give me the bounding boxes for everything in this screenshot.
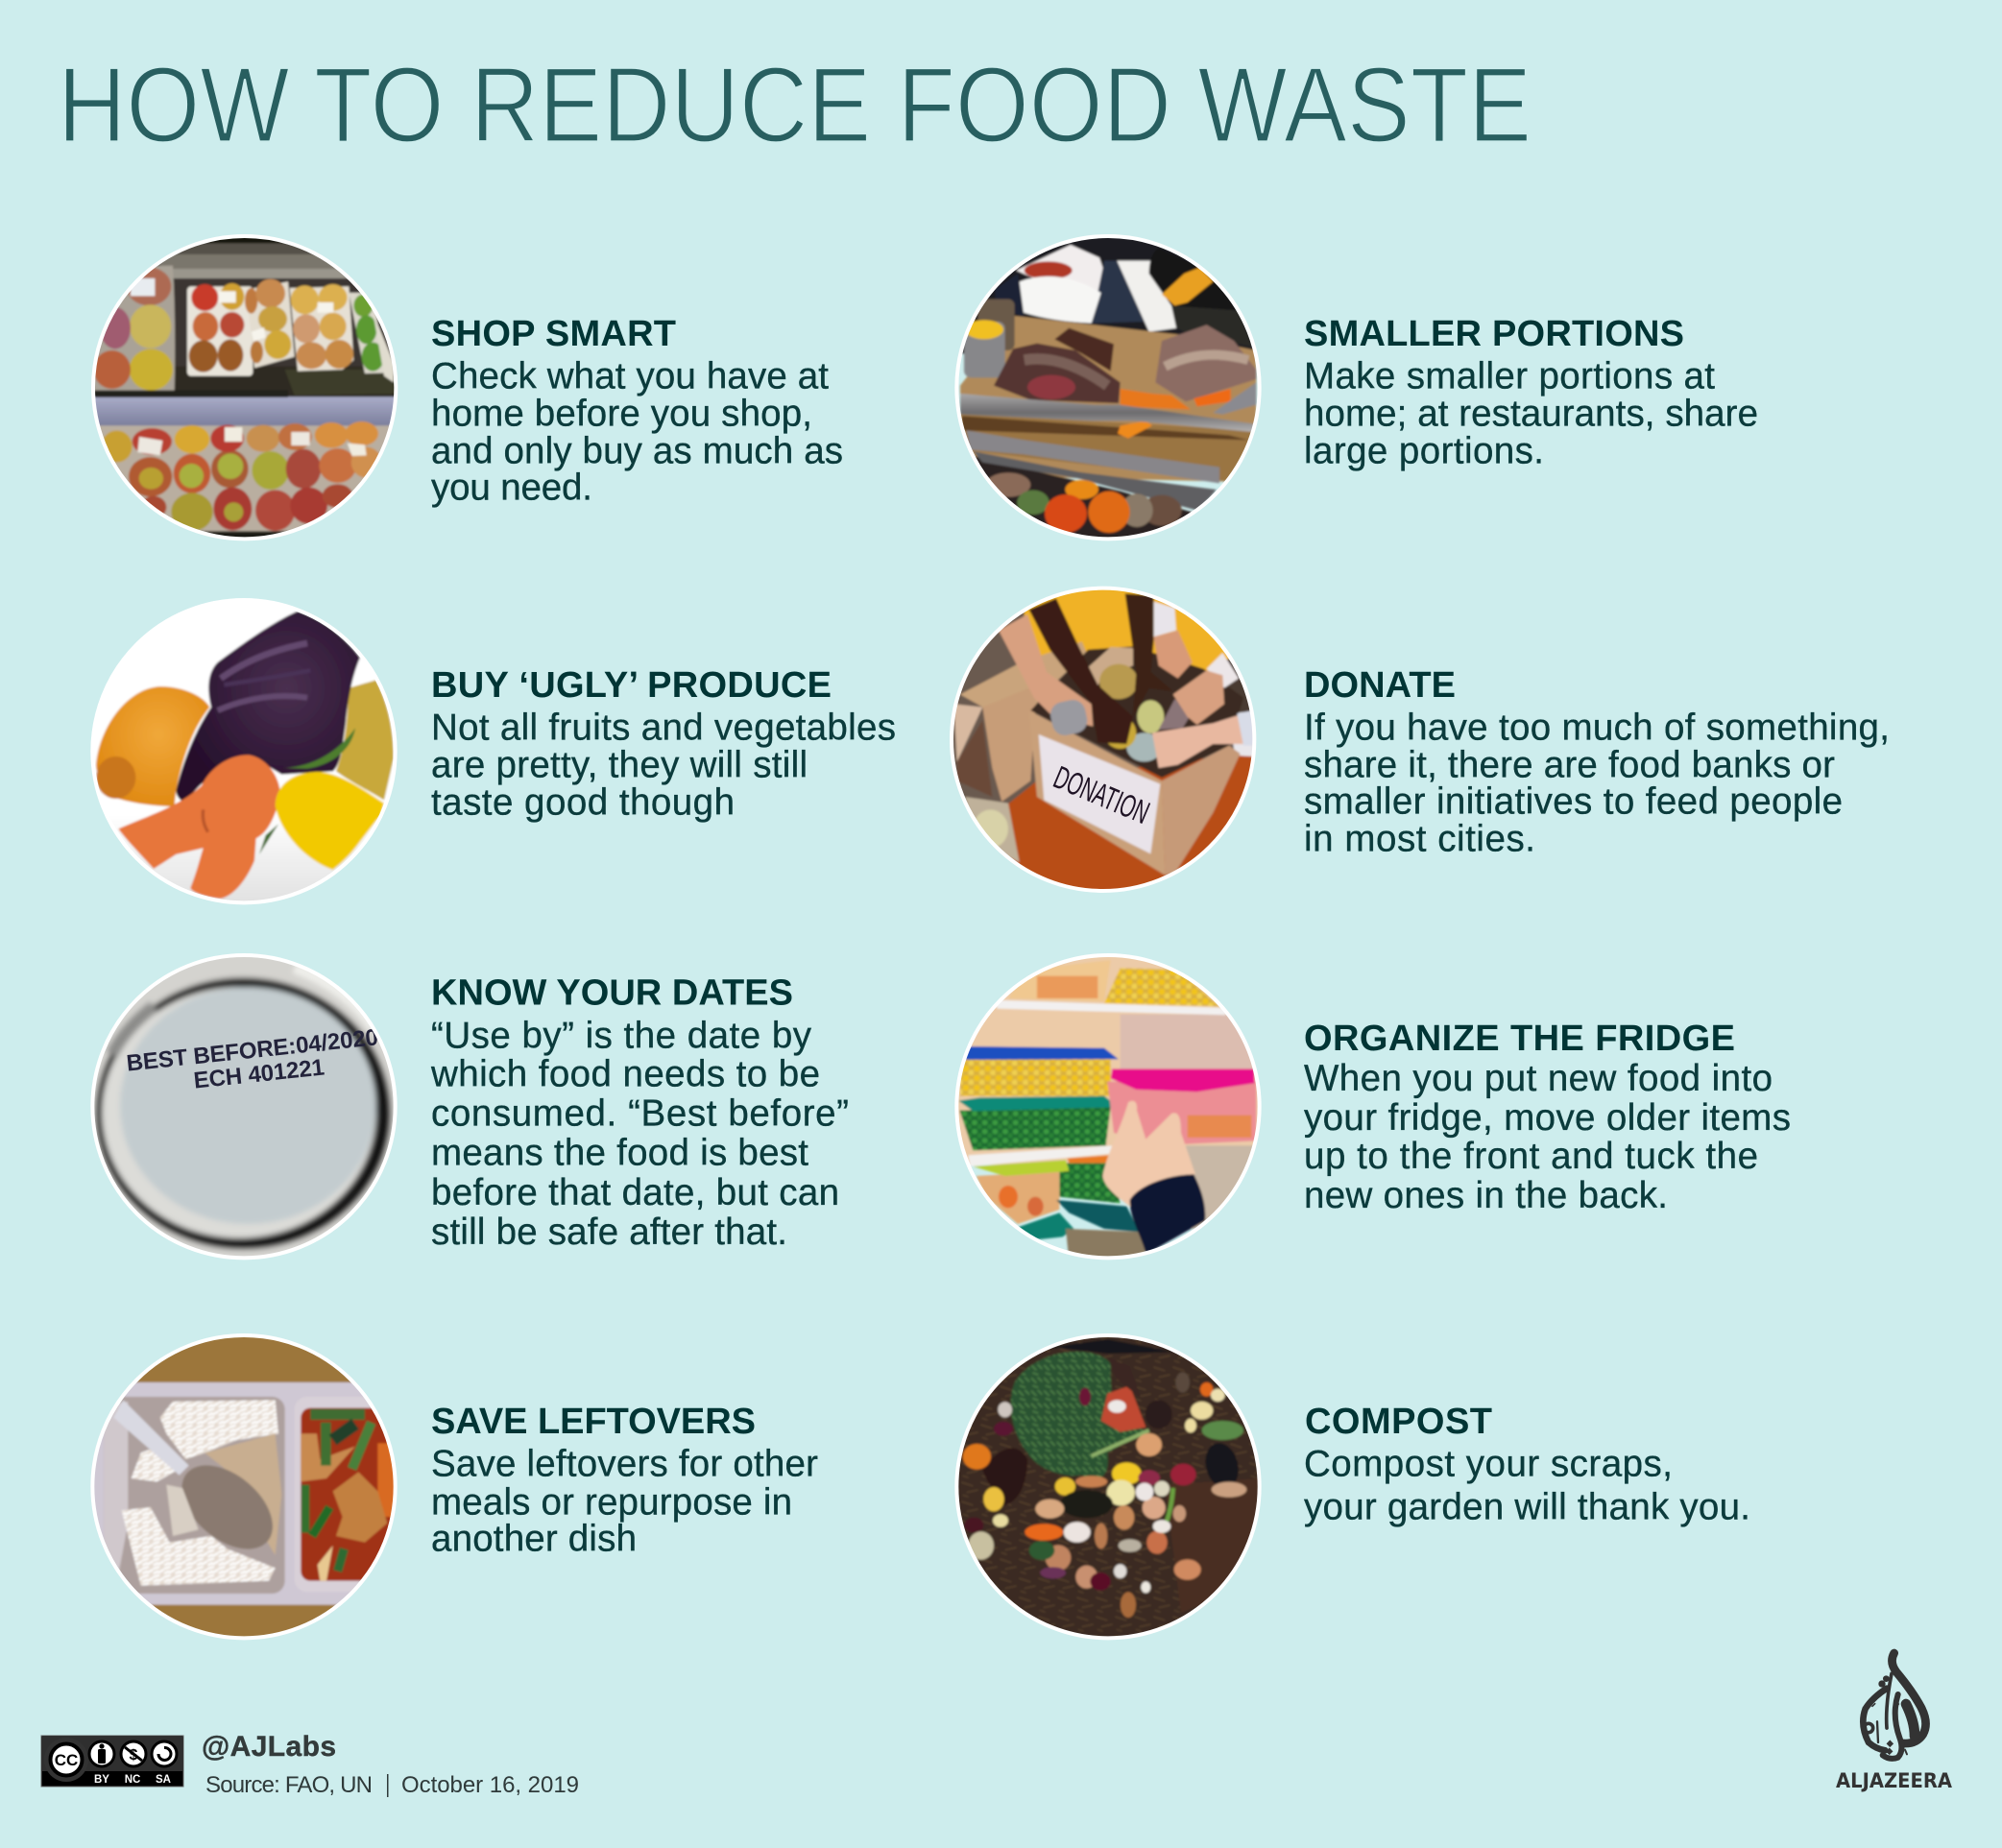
body text: large portions. [1304,431,1544,472]
panel: donate [941,576,1890,902]
photo: can lid with best before date [90,953,398,1260]
footer: creative commons badge [41,1736,183,1787]
photo: can lid with best before date: BEST BEFORE:04/2020 [125,1024,379,1077]
body text: “Use by” is the date by [431,1016,812,1057]
body text [1304,1444,1750,1528]
body text: in most cities. [1304,819,1535,860]
body text: home; at restaurants, share [1304,394,1758,435]
photo: donation box with cans: DONATION [1049,760,1154,831]
body text: new ones in the back. [1304,1175,1668,1216]
body text: When you put new food into [1304,1058,1773,1099]
body text: consumed. “Best before” [431,1092,849,1134]
logo: Al Jazeera: ALJAZEERA [1836,1769,1953,1792]
body text: still be safe after that. [431,1212,787,1253]
body text: up to the front and tuck the [1304,1136,1758,1177]
body text: another dish [431,1519,637,1560]
heading: COMPOST [1305,1402,1492,1442]
body text [1304,708,1890,860]
footer: handle: @AJLabs [202,1731,336,1763]
panel: smaller portions [941,226,1758,545]
body text [1304,356,1758,472]
panel: organize the fridge [941,941,1791,1260]
body text: before that date, but can [431,1172,839,1213]
title: HOW TO REDUCE FOOD WASTE [58,46,1532,165]
photo: misshapen fruit and vegetables [90,598,398,904]
body text: means the food is best [431,1132,808,1173]
body text: smaller initiatives to feed people [1304,781,1843,823]
body text: Save leftovers for other [431,1444,818,1485]
panel: buy ugly produce [77,586,896,912]
body text: which food needs to be [430,1054,820,1095]
panel: know your dates [77,946,849,1272]
footer: source and date: Source: FAO, UN [205,1772,373,1798]
photo: leftovers in a plastic tray [90,1333,398,1640]
body text: home before you shop, [431,394,812,435]
heading: KNOW YOUR DATES [431,973,793,1014]
photo: apples on a shelf [91,234,398,541]
body text: taste good though [431,782,735,824]
footer: creative commons badge: BY [94,1774,109,1786]
body text: your garden will thank you. [1304,1487,1750,1528]
body text [431,356,843,509]
photo: food containers in a fridge [954,953,1262,1260]
body text: Compost your scraps, [1304,1444,1673,1485]
heading: SHOP SMART [431,314,676,354]
body text: Make smaller portions at [1304,356,1715,397]
body text: you need. [431,468,592,509]
body text: If you have too much of something, [1304,708,1890,749]
footer: creative commons badge: $ [130,1747,138,1764]
panel: shop smart [77,226,843,554]
footer: creative commons badge: NC [125,1774,140,1786]
footer: creative commons badge: SA [156,1774,171,1786]
heading: SAVE LEFTOVERS [431,1402,756,1442]
heading: ORGANIZE THE FRIDGE [1304,1019,1735,1059]
body text: share it, there are food banks or [1304,745,1835,786]
heading: BUY ‘UGLY’ PRODUCE [431,665,832,706]
panel: compost [941,1325,1750,1651]
body text [430,1016,849,1253]
footer: creative commons badge: CC [55,1751,78,1769]
body text: your fridge, move older items [1304,1097,1791,1139]
body text: Not all fruits and vegetables [431,708,896,749]
photo: can lid with best before date: ECH 401221 [192,1054,326,1094]
heading: SMALLER PORTIONS [1304,314,1684,354]
body text [431,1444,818,1560]
body text: and only buy as much as [431,431,843,472]
panel: save leftovers [77,1325,818,1651]
photo: donation box with cans [950,586,1256,893]
body text [1304,1058,1791,1216]
photo: compost heap [954,1333,1262,1640]
footer: source and date [205,1772,579,1798]
heading: DONATE [1304,665,1456,706]
body text: meals or repurpose in [431,1482,792,1524]
footer: source and date: October 16, 2019 [401,1772,579,1798]
photo: steak on a board [954,234,1262,541]
body text: Check what you have at [431,356,829,397]
body text [431,708,896,824]
body text: are pretty, they will still [431,745,808,786]
logo: Al Jazeera [1836,1653,1953,1792]
